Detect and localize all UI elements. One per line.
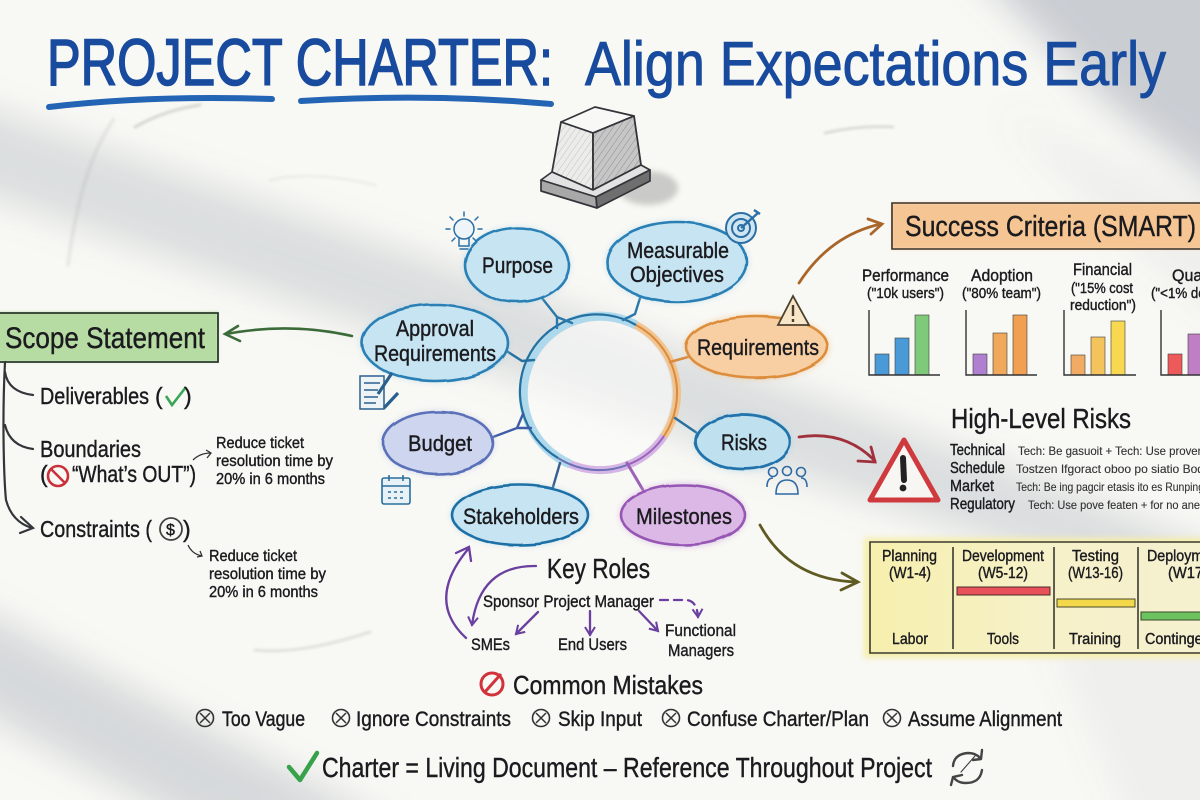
scope tree connector — [3, 362, 33, 533]
arrow: to milestones timeline — [760, 525, 858, 590]
callout: boundaries note: 20% in 6 months — [216, 471, 325, 488]
risks table: Market — [950, 478, 994, 495]
panel: key roles: Managers — [668, 641, 734, 660]
risks table: Tostzen Ifgoract oboo po siatio Bod — [1016, 462, 1200, 476]
arrow: to success criteria — [799, 219, 882, 283]
column: testing: Training — [1069, 631, 1121, 648]
icon: stone pedestal — [541, 107, 678, 208]
deliverables: Deliverables — [40, 383, 149, 409]
bubble: requirements — [685, 315, 829, 379]
risks table: Technical — [950, 442, 1005, 459]
icon: calendar — [382, 475, 410, 504]
panel: high-level risks — [870, 403, 1200, 513]
panel: key roles: Sponsor Project Manager — [483, 592, 654, 611]
boundaries: Boundaries — [40, 436, 141, 462]
constraints: ) — [183, 516, 191, 542]
pencil smudges — [68, 105, 893, 651]
panel: key roles: SMEs — [471, 635, 510, 654]
bubble: purpose — [464, 227, 570, 303]
bubble: risks — [695, 413, 791, 471]
callout: boundaries note: Reduce ticket — [216, 435, 305, 452]
mistake: too vague — [196, 708, 305, 731]
bubble: purpose: Purpose — [482, 253, 553, 278]
hub circle — [520, 314, 677, 470]
chart: quality — [1151, 266, 1200, 375]
column: development — [957, 548, 1050, 648]
closing message: Charter = Living Document – Reference Throughout Project — [322, 752, 932, 783]
risks table: Regulatory — [950, 496, 1015, 513]
panel: success criteria — [862, 203, 1200, 375]
panel: key roles: Functional — [665, 621, 736, 640]
chart: financial: reduction") — [1070, 297, 1136, 314]
icon: warning triangle — [778, 296, 809, 325]
panel: common mistakes — [196, 670, 1062, 731]
chart: financial: Financial — [1073, 260, 1132, 279]
panel: key roles: Key Roles — [547, 553, 650, 584]
callout: constraints note: 20% in 6 months — [209, 584, 318, 601]
arrow: to high-level risks — [799, 436, 875, 462]
chart: adoption: Adoption — [971, 266, 1033, 285]
constraints: Constraints ( — [40, 516, 152, 542]
title — [47, 25, 1166, 107]
icon: checklist and pen — [360, 373, 398, 409]
chart: performance — [862, 266, 949, 375]
bubble: stakeholders: Stakeholders — [463, 504, 579, 529]
mistake: assume alignment: Assume Alignment — [908, 708, 1062, 731]
chart: performance: Performance — [862, 266, 949, 285]
bubble: measurable objectives — [606, 221, 748, 303]
panel: key roles — [446, 547, 736, 660]
boundaries — [40, 436, 196, 487]
chart: financial: ("15% cost — [1071, 280, 1134, 297]
mistake: skip input: Skip Input — [558, 708, 642, 731]
boundaries: ( — [40, 461, 48, 487]
icon: red warning triangle — [870, 440, 938, 500]
chart: adoption: ("80% team") — [962, 285, 1041, 302]
mind map — [360, 210, 829, 547]
bubble: milestones — [620, 483, 746, 547]
bubble: risks: Risks — [721, 430, 767, 455]
column: planning: Labor — [892, 631, 929, 648]
callout: constraints note — [188, 545, 326, 601]
bubble: budget — [382, 411, 494, 475]
panel: scope statement — [0, 312, 333, 601]
column: planning — [882, 548, 937, 648]
hub connectors — [493, 293, 697, 490]
bubble: approval requirements — [361, 304, 509, 382]
column: planning: (W1-4) — [889, 565, 931, 582]
icon: light bulb — [446, 212, 482, 249]
mistake: too vague: Too Vague — [222, 708, 305, 731]
icon: team of people — [767, 466, 807, 494]
mistake: confuse charter and plan: Confuse Charter/Plan — [687, 708, 869, 731]
callout: boundaries note — [193, 435, 333, 488]
column: testing — [1057, 548, 1135, 648]
title underline strokes — [49, 98, 551, 107]
mistakes heading: Common Mistakes — [513, 670, 703, 700]
icon: refresh cycle — [951, 750, 982, 785]
bubble: requirements: Requirements — [697, 335, 819, 360]
bubble: approval requirements: Requirements — [374, 341, 496, 366]
title: PROJECT CHARTER: — [47, 25, 553, 99]
boundaries: “What’s OUT”) — [72, 461, 196, 487]
deliverables: ) — [184, 383, 192, 409]
success heading — [892, 203, 1200, 249]
column: planning: Planning — [882, 548, 937, 565]
column: development: (W5-12) — [978, 565, 1028, 582]
column: deployment — [1141, 548, 1200, 648]
chart: adoption — [962, 266, 1041, 375]
risks table — [950, 442, 1200, 513]
panel: milestones timeline — [864, 538, 1200, 658]
chart: financial — [1064, 260, 1136, 375]
scope heading: Scope Statement — [5, 322, 206, 355]
column: development: Tools — [987, 631, 1019, 648]
bubble: measurable objectives: Objectives — [630, 262, 724, 287]
scope heading — [0, 312, 218, 362]
column: development: Development — [962, 548, 1044, 565]
arrow: to scope statement — [225, 326, 352, 341]
icon: target with dart — [726, 210, 760, 243]
deliverables: ( — [155, 383, 163, 409]
bubble: approval requirements: Approval — [396, 316, 474, 341]
role arrows — [446, 547, 698, 638]
callout: constraints note: resolution time by — [209, 566, 326, 583]
bubble: budget: Budget — [408, 431, 472, 456]
panel: key roles: End Users — [558, 635, 627, 654]
risks heading: High-Level Risks — [951, 403, 1131, 434]
callout: boundaries note: resolution time by — [216, 453, 333, 470]
chart: performance: ("10k users") — [867, 285, 944, 302]
bubble: stakeholders — [451, 484, 589, 546]
bubble: measurable objectives: Measurable — [627, 238, 729, 263]
column: testing: (W13-16) — [1068, 565, 1123, 582]
bubble: milestones: Milestones — [636, 504, 732, 529]
risks table: Schedule — [950, 460, 1005, 477]
icon: green check — [289, 753, 317, 780]
mistake: ignore constraints: Ignore Constraints — [356, 708, 511, 731]
column: testing: Testing — [1072, 548, 1119, 565]
constraints: $ — [166, 522, 175, 539]
callout: constraints note: Reduce ticket — [209, 548, 298, 565]
